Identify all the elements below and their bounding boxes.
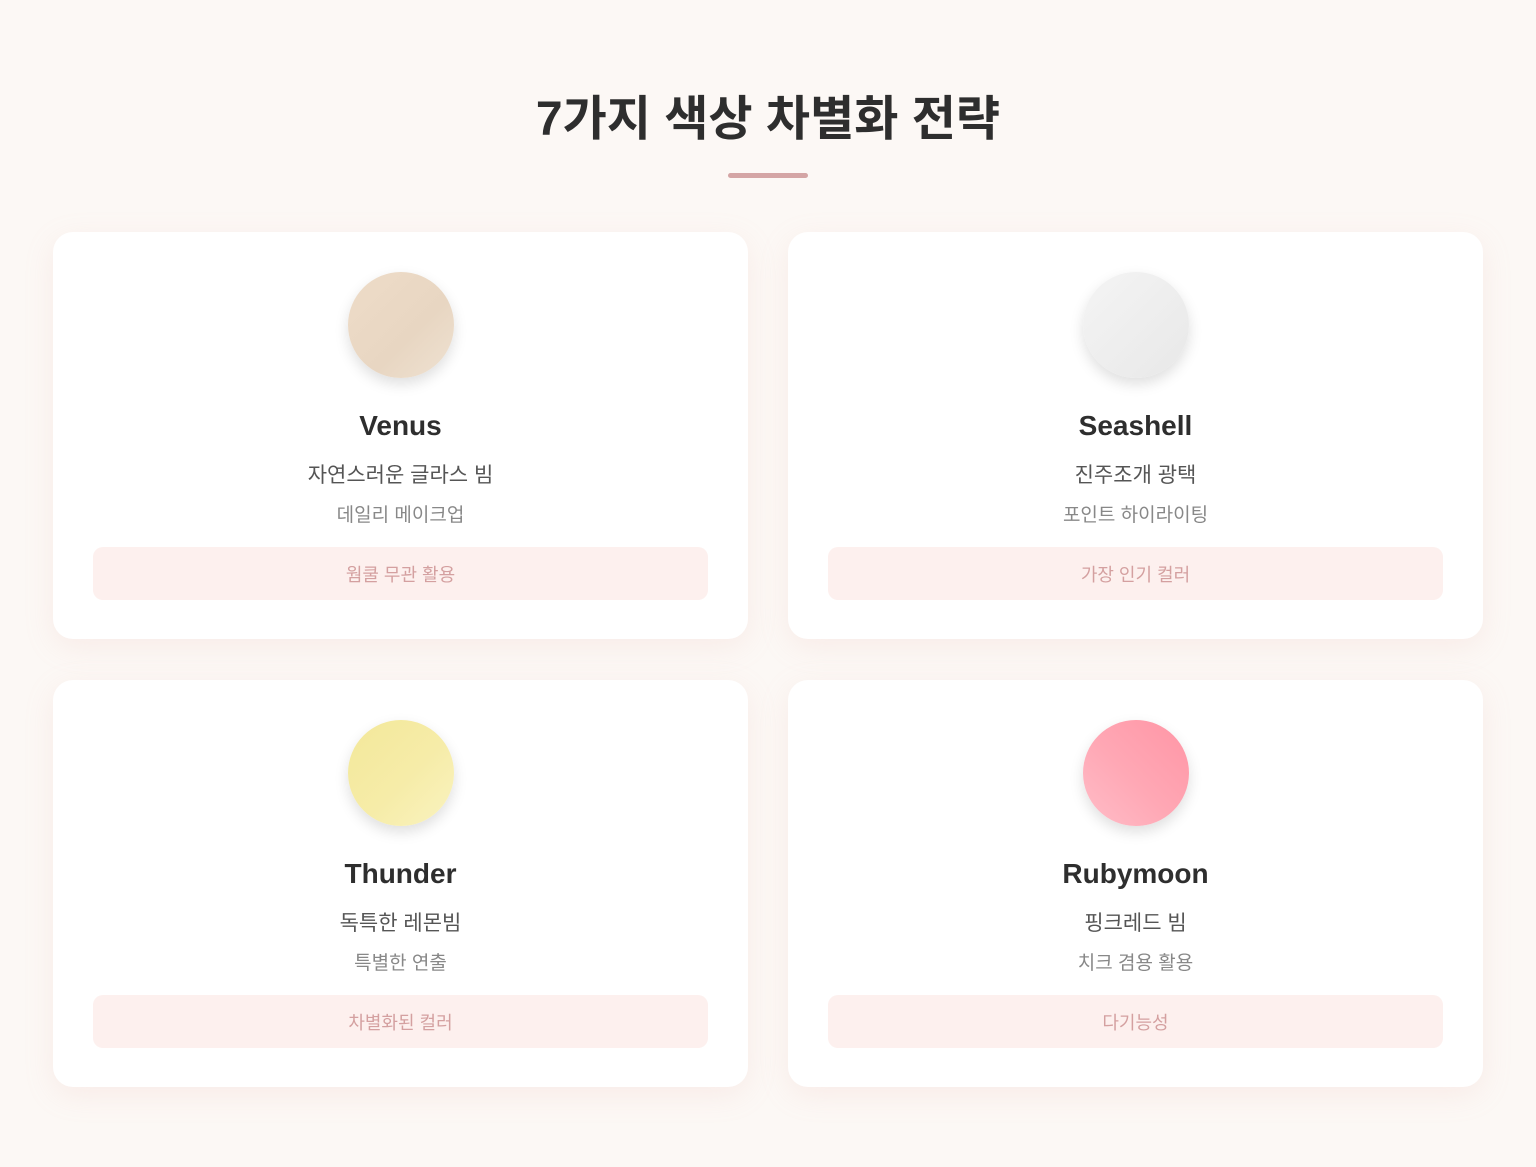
description: 진주조개 광택 bbox=[1075, 464, 1196, 487]
tag bbox=[93, 547, 708, 600]
tag: 차별화된 컬러 bbox=[348, 1013, 453, 1033]
tag: 웜쿨 무관 활용 bbox=[346, 565, 455, 585]
usage: 데일리 메이크업 bbox=[337, 505, 464, 526]
title: 7가지 색상 차별화 전략 bbox=[536, 93, 1000, 146]
name: Venus bbox=[359, 410, 442, 441]
swatch: Venus bbox=[348, 272, 454, 378]
swatch: Seashell bbox=[1083, 272, 1189, 378]
tag: 다기능성 bbox=[1102, 1013, 1169, 1033]
card: Rubymoon bbox=[788, 680, 1483, 1087]
description: 독특한 레몬빔 bbox=[340, 912, 461, 935]
description: 핑크레드 빔 bbox=[1084, 912, 1187, 935]
card: Thunder bbox=[53, 680, 748, 1087]
description: 자연스러운 글라스 빔 bbox=[308, 464, 493, 487]
tag bbox=[828, 995, 1443, 1048]
swatch: Rubymoon bbox=[1083, 720, 1189, 826]
swatch: Thunder bbox=[348, 720, 454, 826]
usage: 포인트 하이라이팅 bbox=[1063, 505, 1208, 526]
tag bbox=[828, 547, 1443, 600]
card: Venus bbox=[53, 232, 748, 639]
usage: 치크 겸용 활용 bbox=[1078, 953, 1193, 974]
title underline bbox=[728, 173, 808, 178]
tag bbox=[93, 995, 708, 1048]
tag: 가장 인기 컬러 bbox=[1081, 565, 1190, 585]
card: Seashell bbox=[788, 232, 1483, 639]
name: Thunder bbox=[344, 858, 456, 889]
usage: 특별한 연출 bbox=[354, 953, 447, 974]
name: Seashell bbox=[1079, 410, 1192, 441]
name: Rubymoon bbox=[1062, 858, 1209, 889]
